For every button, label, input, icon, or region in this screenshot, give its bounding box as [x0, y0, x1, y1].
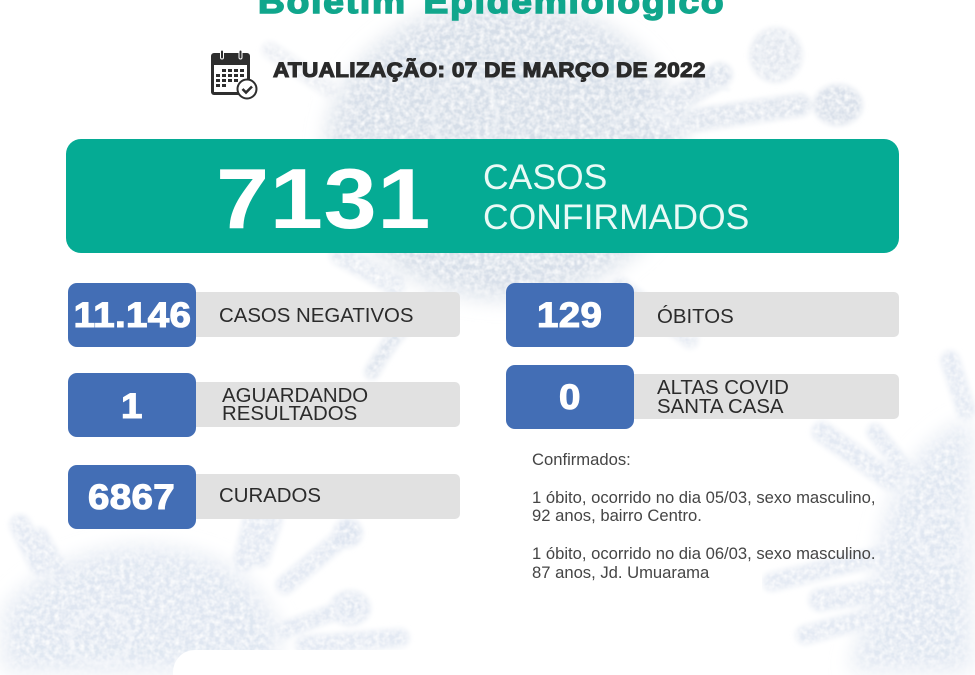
stat: curados: 6867 — [89, 478, 175, 517]
stat: aguardando resultados — [68, 373, 460, 437]
stat: obitos — [506, 283, 899, 347]
panel: bottom white card — [173, 650, 823, 675]
notes on confirmed deaths: 92 anos, bairro Centro. — [532, 506, 702, 525]
stat: altas covid — [506, 365, 899, 429]
stat: altas covid: ALTAS COVID — [657, 377, 789, 399]
notes on confirmed deaths: 87 anos, Jd. Umuarama — [532, 563, 709, 582]
stat: altas covid: 0 — [559, 378, 581, 417]
stat: casos negativos: 11.146 — [73, 296, 191, 335]
stat: obitos: 129 — [537, 296, 603, 335]
stat: curados: CURADOS — [219, 485, 321, 507]
notes on confirmed deaths: Confirmados: — [532, 450, 631, 469]
stat: aguardando resultados: RESULTADOS — [222, 403, 357, 425]
notes on confirmed deaths — [532, 450, 875, 582]
stat: curados — [68, 465, 460, 529]
confirmed label: CONFIRMADOS — [483, 197, 749, 237]
panel: confirmed cases — [66, 139, 899, 253]
notes on confirmed deaths: 1 óbito, ocorrido no dia 06/03, sexo masculino. — [532, 544, 875, 563]
top virus — [270, 2, 862, 372]
stat: casos negativos — [68, 283, 460, 347]
confirmed number: 7131 — [216, 152, 431, 247]
stat: obitos: ÓBITOS — [657, 306, 734, 328]
stat: aguardando resultados: AGUARDANDO — [222, 385, 368, 407]
stat: casos negativos: CASOS NEGATIVOS — [219, 305, 414, 327]
right virus — [772, 360, 970, 670]
confirmed label: CASOS — [483, 157, 607, 197]
bottom-left virus — [5, 519, 400, 670]
stat: aguardando resultados: 1 — [121, 387, 143, 426]
confirmed label — [483, 157, 749, 237]
stat: altas covid: SANTA CASA — [657, 396, 784, 418]
update date: ATUALIZAÇÃO: 07 DE MARÇO DE 2022 — [273, 59, 706, 82]
icon: calendar with check — [211, 50, 258, 100]
notes on confirmed deaths: 1 óbito, ocorrido no dia 05/03, sexo masculino, — [532, 488, 875, 507]
